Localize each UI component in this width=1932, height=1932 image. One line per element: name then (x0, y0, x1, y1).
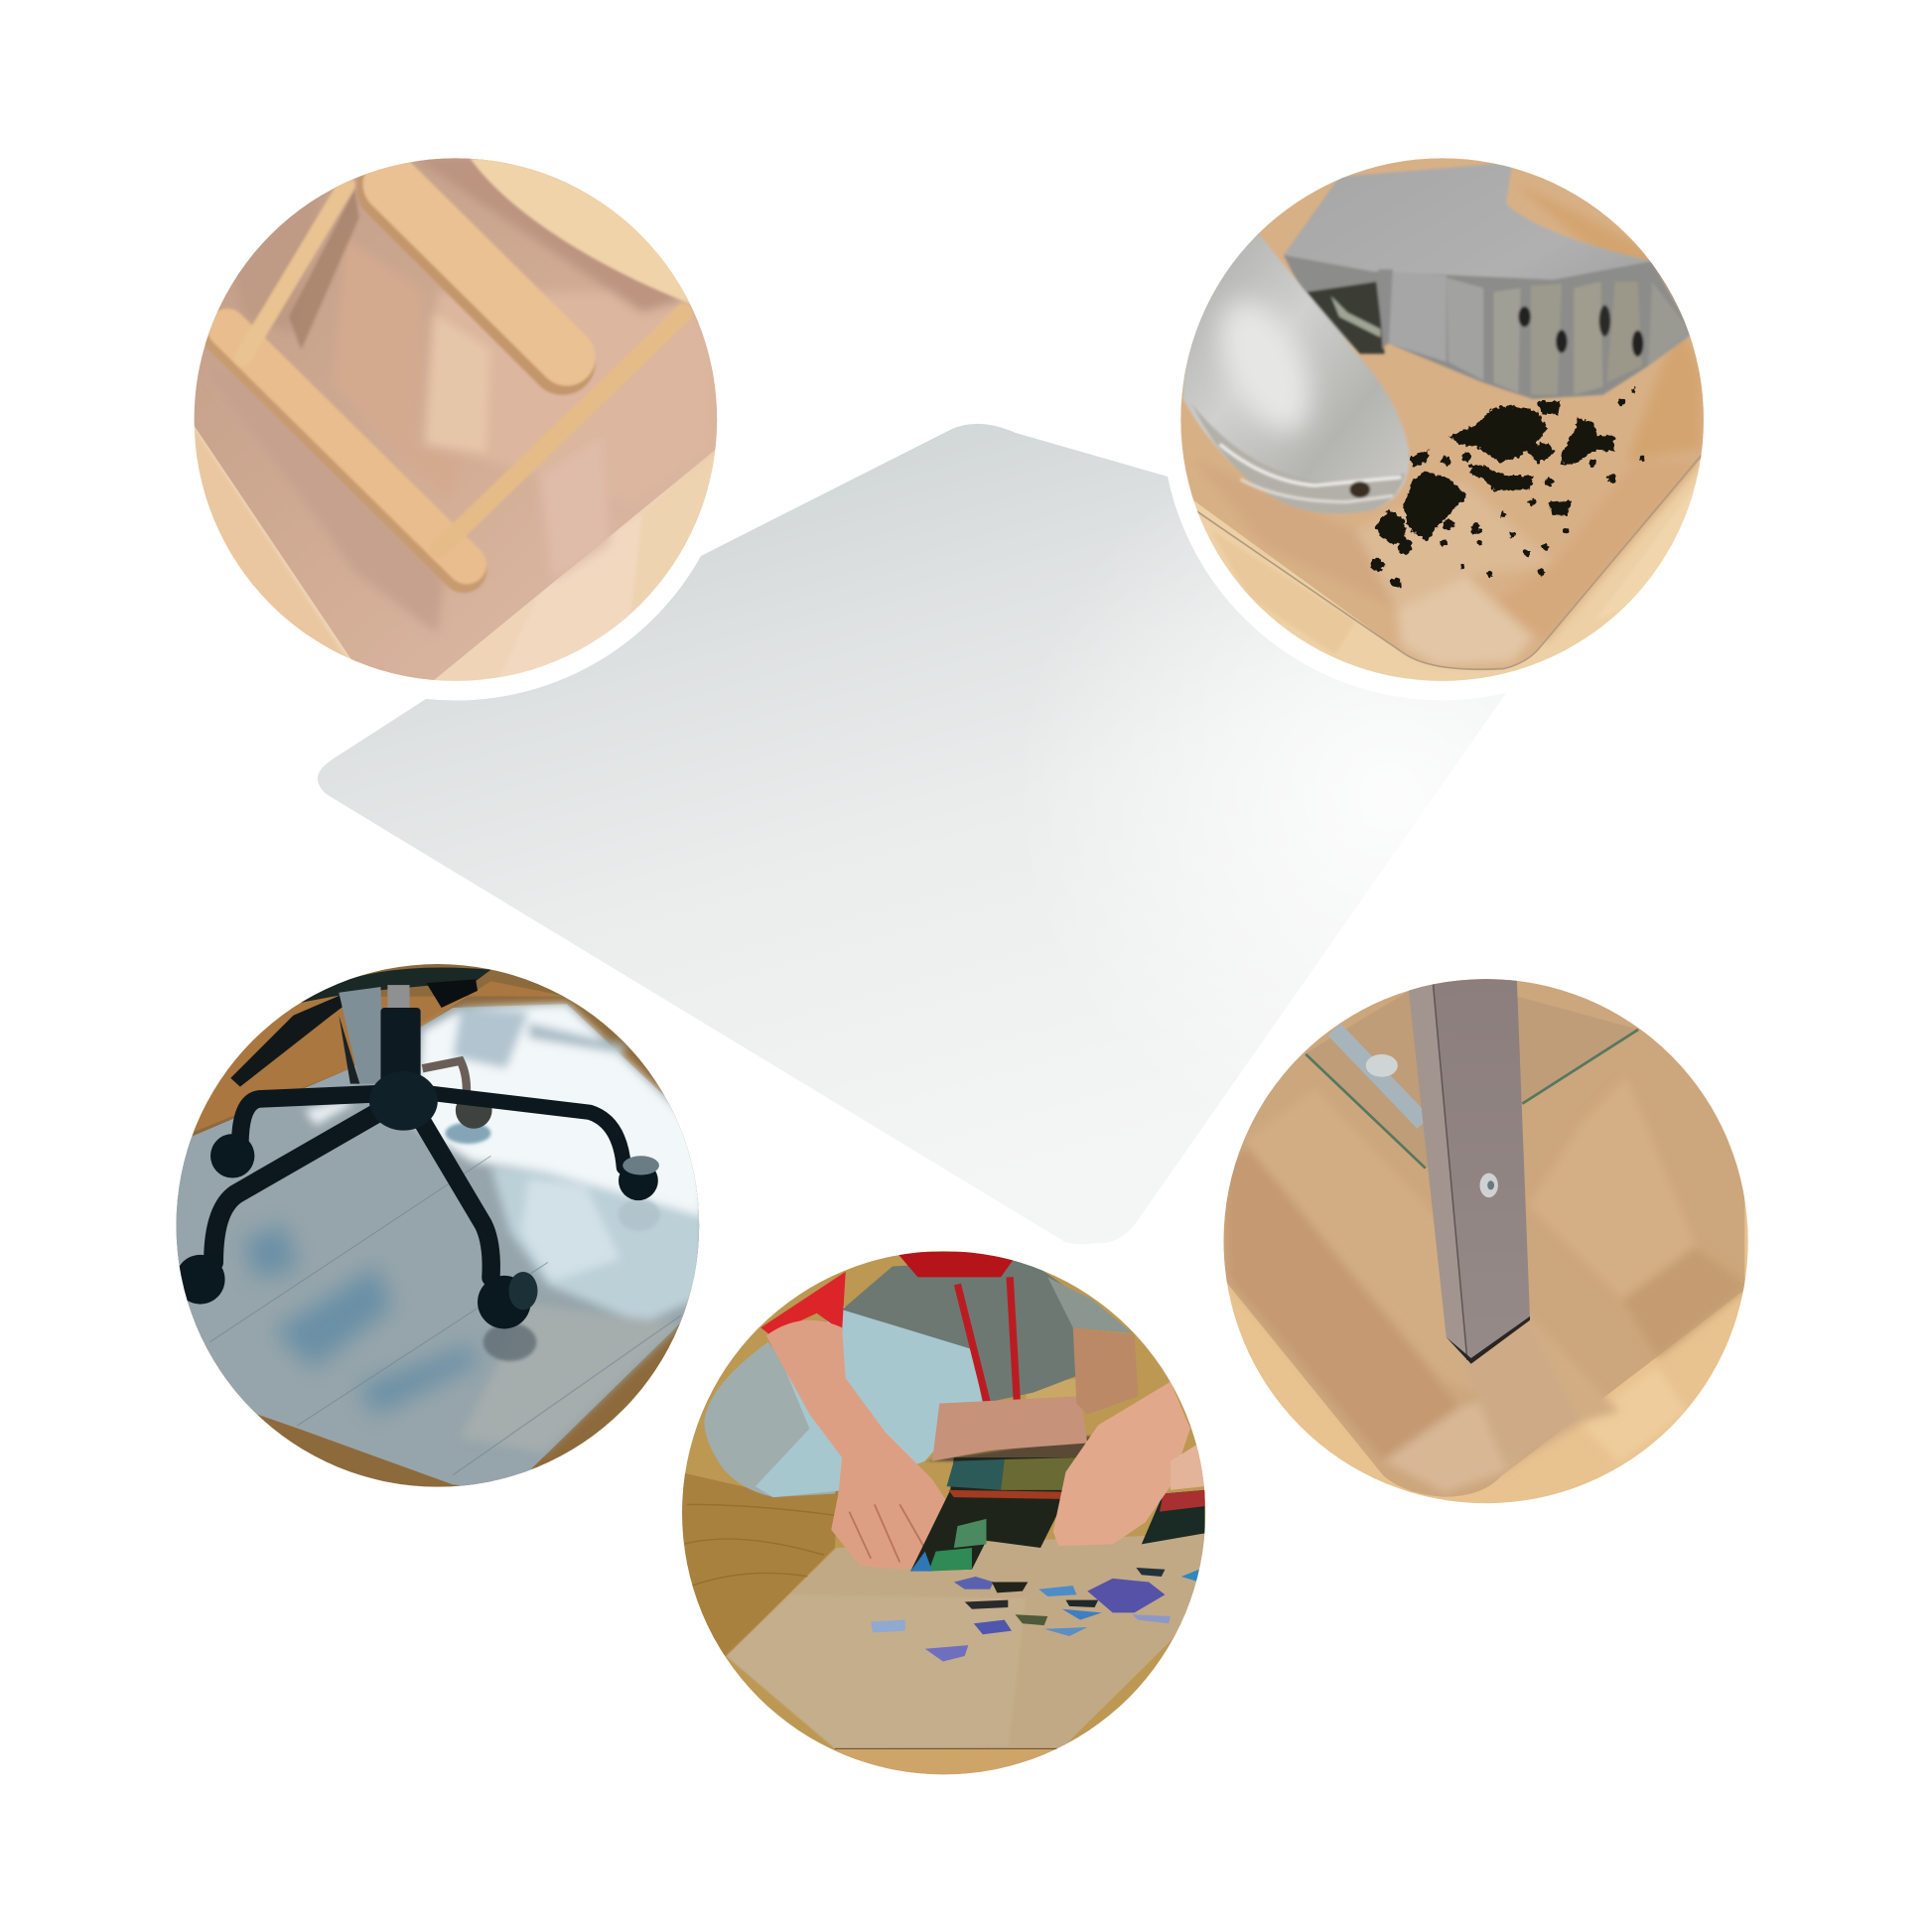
child: drawstrings (957, 1277, 1017, 1414)
front boot (1182, 233, 1410, 513)
glass shelf (1304, 974, 1638, 1169)
hub (369, 1071, 438, 1131)
child: grey trouser knee (704, 1342, 842, 1497)
child: shirt (842, 1259, 1133, 1404)
child: red neck (897, 1252, 1019, 1277)
bracket (339, 987, 384, 1084)
mat over floor (727, 1533, 1210, 1748)
soil clumps (1371, 388, 1644, 589)
loose puzzle pieces (871, 1568, 1199, 1661)
mat edge (1195, 453, 1704, 669)
photo circle: child doing a jigsaw on mat (680, 1248, 1210, 1779)
child: foot and shin (932, 1396, 1087, 1461)
child: blue trousers (756, 1306, 983, 1497)
child: red sleeve (760, 1272, 846, 1335)
star base arms (213, 1093, 623, 1278)
plank lines (209, 1156, 681, 1475)
photo circle: table leg on mat (1220, 974, 1752, 1506)
mat surface (190, 156, 725, 684)
seat underside (230, 967, 490, 1087)
photo circle: silver rubber boots with soil (1178, 156, 1710, 687)
top slat (390, 185, 567, 362)
back boot (1284, 163, 1694, 399)
mat surface (172, 1004, 704, 1486)
child: dark floor gap below foot (925, 1436, 1091, 1461)
soft planks under the mat (1361, 190, 1704, 668)
seat (470, 159, 689, 304)
child: upper right arm (1073, 1327, 1138, 1414)
wood floor upper left (194, 981, 564, 1132)
table leg (1409, 974, 1530, 1364)
rods (243, 185, 684, 549)
clear floor mat with two scalloped notches (318, 417, 1787, 1244)
floor grain (683, 1504, 835, 1587)
mat surface (1220, 974, 1744, 1497)
floor planks corner (1218, 489, 1694, 651)
back arm and caster (423, 1061, 492, 1129)
puzzle in progress (910, 1457, 1204, 1572)
gas column (380, 1008, 421, 1084)
soft planks under the mat (203, 156, 713, 633)
shadow under rod (289, 189, 358, 349)
floor planks below the mat (190, 428, 717, 687)
blue streaks (244, 1224, 480, 1415)
mat surface (1178, 156, 1710, 669)
child: left arm (766, 1320, 958, 1570)
photo circle: wooden chair legs on mat (190, 144, 746, 687)
child: right hand (1053, 1382, 1190, 1546)
photo circle: office chair on mat (172, 962, 704, 1494)
soft planks under the mat (1224, 1077, 1744, 1493)
foot bar (223, 329, 467, 570)
sunlit area (305, 1004, 704, 1452)
caster shadows (446, 1123, 660, 1361)
casters (176, 1134, 659, 1328)
